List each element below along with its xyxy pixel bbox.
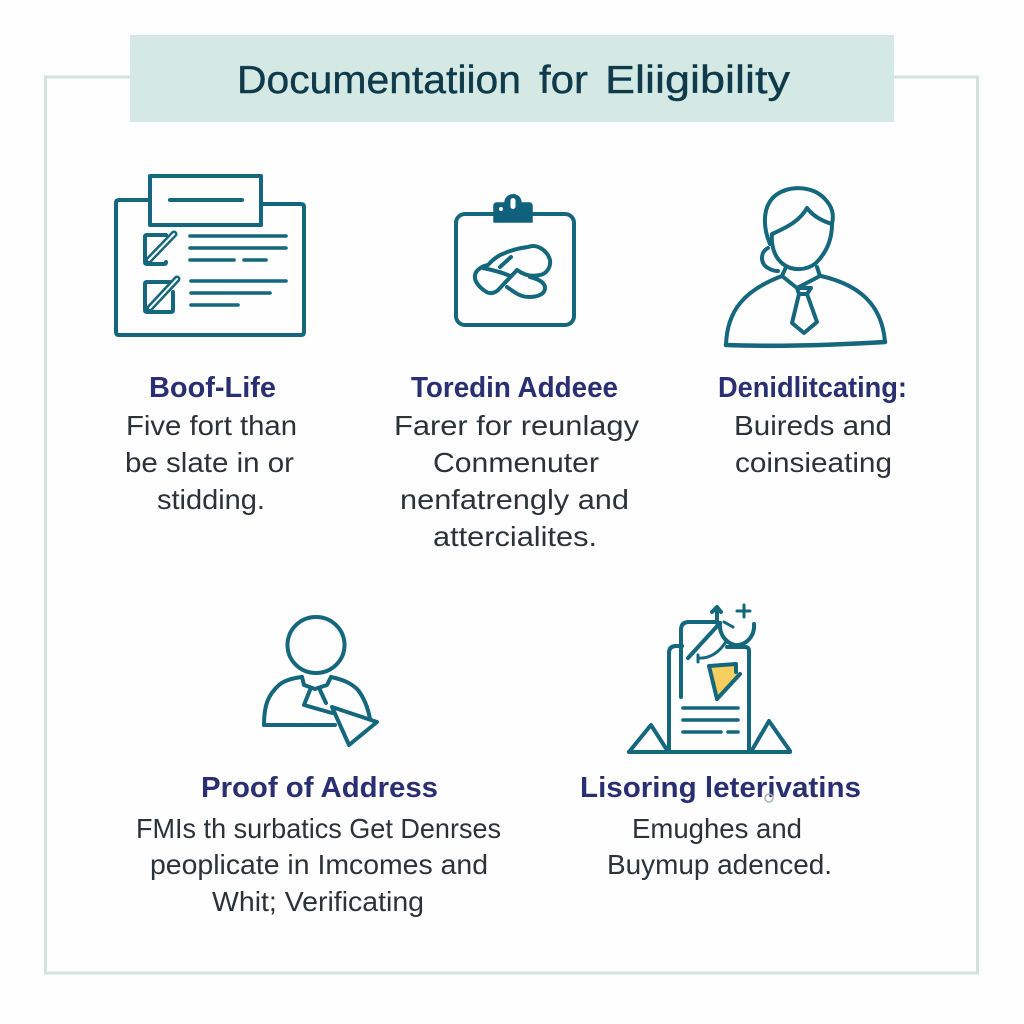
description: FMIs th surbatics Get Denrses <box>136 813 501 844</box>
description: Buireds and <box>734 410 892 441</box>
description: Conmenuter <box>433 447 599 478</box>
title banner <box>130 35 894 122</box>
description <box>734 410 892 478</box>
description: attercialites. <box>433 521 597 552</box>
heading: Proof of Address <box>201 772 438 804</box>
icon: person with arrow <box>264 617 377 745</box>
description: coinsieating <box>735 447 892 478</box>
icon: person with tie <box>726 188 885 346</box>
panel: item 3 <box>718 188 907 478</box>
title <box>237 59 791 102</box>
panel: item 2 <box>394 195 639 552</box>
icon: clipboard with capsules <box>456 195 574 325</box>
description: Five fort than <box>126 410 297 441</box>
title: Eliigibility <box>605 59 791 102</box>
description: stidding. <box>157 484 265 515</box>
outer frame <box>46 77 978 973</box>
description: nenfatrengly and <box>400 484 629 515</box>
icon: document with triangles and arrow <box>629 605 790 752</box>
heading: Toredin Addeee <box>411 372 618 404</box>
heading: Lisoring leterivatins <box>580 772 861 804</box>
panel: item 5 <box>580 605 861 880</box>
description <box>607 813 832 880</box>
description <box>125 410 297 515</box>
description: Buymup adenced. <box>607 849 832 880</box>
description: Whit; Verificating <box>212 886 424 917</box>
heading: Boof-Life <box>149 372 276 404</box>
icon: checklist form <box>116 176 304 335</box>
panel: item 4 <box>136 617 501 917</box>
description: peoplicate in Imcomes and <box>150 849 488 880</box>
description <box>394 410 639 552</box>
small smudge mark <box>765 794 773 802</box>
panel: item 1 <box>116 176 304 515</box>
description <box>136 813 501 917</box>
title: Documentatiion <box>237 59 521 102</box>
description: be slate in or <box>125 447 294 478</box>
description: Emughes and <box>632 813 802 844</box>
description: Farer for reunlagy <box>394 410 639 441</box>
heading: Denidlitcating: <box>718 372 907 404</box>
title: for <box>539 59 588 102</box>
